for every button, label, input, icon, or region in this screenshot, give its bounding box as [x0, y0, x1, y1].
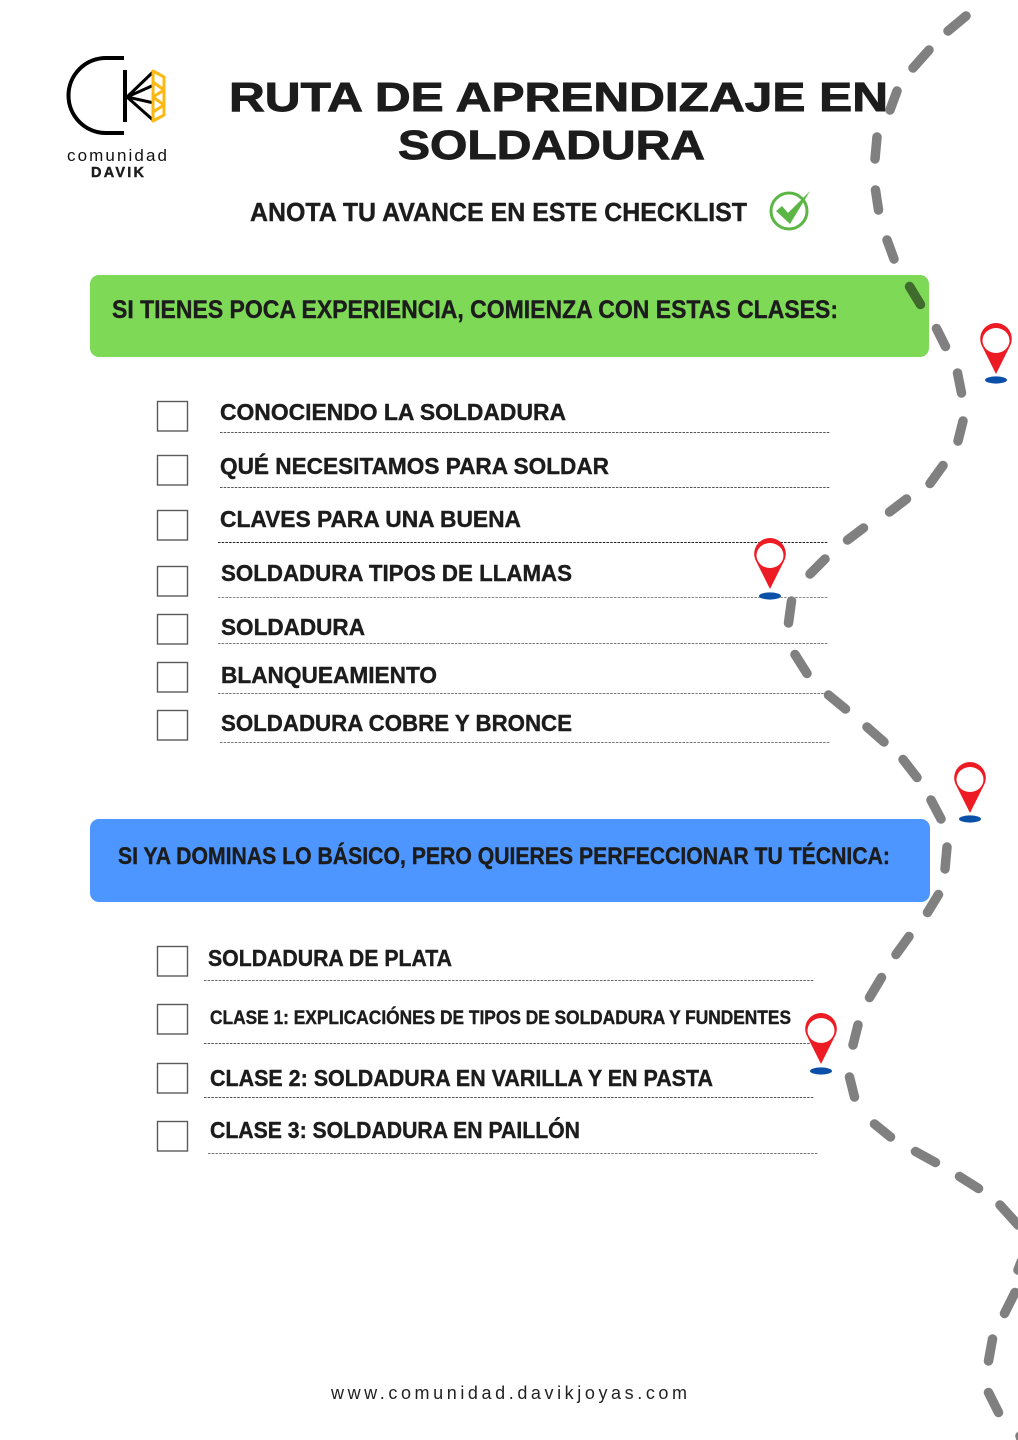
title: RUTA DE APRENDIZAJE EN: [229, 74, 888, 120]
panel: blue section banner: [90, 819, 930, 902]
item: Soldadura: SOLDADURA: [221, 614, 365, 640]
item: Qué necesitamos para soldar: [158, 452, 830, 488]
item: Clase 2: CLASE 2: SOLDADURA EN VARILLA Y EN PASTA: [210, 1065, 713, 1091]
panel: green section banner: [90, 275, 929, 357]
icon: green check: [771, 191, 810, 229]
dashed route path: [788, 16, 1018, 1440]
item: Soldadura cobre y bronce: SOLDADURA COBRE Y BRONCE: [221, 710, 572, 736]
item: Claves para una buena: [158, 506, 828, 542]
item: Clase 1: [158, 1004, 814, 1044]
item: Soldadura: [158, 614, 828, 644]
item: Clase 3: [158, 1116, 818, 1154]
logo wordmark: comunidad: [67, 146, 167, 165]
item: Conociendo la soldadura: CONOCIENDO LA SOLDADURA: [220, 399, 566, 425]
footer website: www.comunidad.davikjoyas.com: [330, 1383, 687, 1403]
checklist: advanced classes: [158, 945, 818, 1154]
icon: yellow gem: [153, 71, 164, 121]
item: Blanqueamiento: [158, 662, 828, 694]
subtitle: ANOTA TU AVANCE EN ESTE CHECKLIST: [250, 197, 747, 227]
item: Clase 3: CLASE 3: SOLDADURA EN PAILLÓN: [210, 1116, 580, 1143]
icon: map pin 4: [805, 1013, 837, 1075]
icon: K rays: [127, 72, 154, 120]
title: [229, 74, 888, 168]
icon: map pin 1: [980, 323, 1012, 384]
item: Clase 1: CLASE 1: EXPLICACIÓNES DE TIPOS DE SOLDADURA Y FUNDENTES: [210, 1005, 791, 1029]
title: SOLDADURA: [398, 122, 705, 168]
item: Conociendo la soldadura: [158, 399, 830, 432]
item: Qué necesitamos para soldar: QUÉ NECESITAMOS PARA SOLDAR: [220, 452, 609, 479]
logo wordmark bold: DAVIK: [91, 165, 145, 181]
item: Soldadura tipos de llamas: [158, 560, 828, 598]
heading: beginner section: SI TIENES POCA EXPERIENCIA, COMIENZA CON ESTAS CLASES:: [112, 296, 838, 324]
item: Clase 2: [158, 1064, 814, 1098]
item: Soldadura de plata: SOLDADURA DE PLATA: [208, 945, 452, 971]
item: Soldadura de plata: [158, 945, 814, 980]
item: Soldadura tipos de llamas: SOLDADURA TIPOS DE LLAMAS: [221, 560, 572, 586]
icon: K diamond rays: [123, 70, 127, 122]
icon: map pin 2: [754, 538, 786, 600]
logo: comunidad DAVIK: [67, 58, 167, 181]
checklist: beginner classes: [158, 399, 830, 742]
heading: advanced section: SI YA DOMINAS LO BÁSICO, PERO QUIERES PERFECCIONAR TU TÉCNICA:: [118, 842, 890, 870]
item: Claves para una buena: CLAVES PARA UNA BUENA: [220, 506, 521, 532]
item: Blanqueamiento: BLANQUEAMIENTO: [221, 662, 437, 688]
icon: C letter arc: [69, 58, 124, 133]
item: Soldadura cobre y bronce: [158, 710, 830, 742]
icon: map pin 3: [954, 762, 986, 823]
